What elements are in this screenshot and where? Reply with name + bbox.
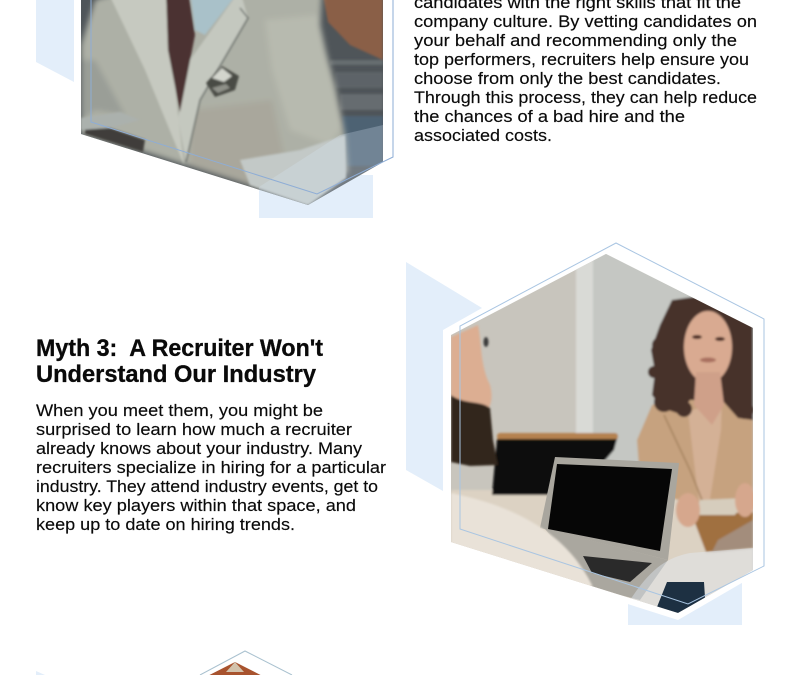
- text block: myth 3 body: [36, 401, 386, 534]
- photo: interview at a table: [451, 250, 757, 615]
- text block: myth 3 body: keep up to date on hiring trends.: [36, 515, 295, 534]
- section: next myth image (cropped): [36, 651, 292, 675]
- accent: bottom blue block: [259, 175, 373, 218]
- outline: hexagon frame: [460, 243, 764, 604]
- photo: top of next hexagon: [210, 662, 260, 675]
- outline: hexagon frame: [200, 651, 292, 675]
- accent: bottom blue block: [628, 570, 742, 625]
- text block: myth 3 body: know key players within that space, and: [36, 496, 356, 515]
- man on left: [451, 325, 492, 420]
- text block: myth 3 body: recruiters specialize in hiring for a particular: [36, 458, 386, 477]
- white hexagon backing: [445, 247, 759, 620]
- laptop: [540, 457, 679, 600]
- woman: curly hair: [651, 296, 753, 420]
- heading: myth 3: [36, 335, 323, 388]
- white shirt: [451, 493, 593, 586]
- text block: myth 2 body: Through this process, they can help reduce: [414, 88, 757, 107]
- heading: myth 3: Understand Our Industry: [36, 361, 317, 388]
- overlay: [631, 548, 753, 606]
- text block: myth 2 body: the chances of a bad hire and the: [414, 107, 685, 126]
- text block: myth 3 body: surprised to learn how much a recruiter: [36, 420, 352, 439]
- photo: man in light grey suit: [81, 0, 383, 210]
- text block: myth 2 body: [414, 0, 757, 145]
- accent: left blue block: [36, 0, 74, 82]
- accent: left blue block: [406, 262, 482, 491]
- text block: myth 2 body: top performers, recruiters help ensure you: [414, 50, 749, 69]
- phone: [657, 582, 705, 613]
- section: myth 2 image: [36, 0, 393, 218]
- text block: myth 2 body: associated costs.: [414, 126, 552, 145]
- text block: myth 2 body: your behalf and recommending only the: [414, 31, 737, 50]
- chair: [497, 433, 618, 440]
- text block: myth 3 body: industry. They attend industry events, get to: [36, 477, 378, 496]
- overlay: [259, 125, 383, 210]
- text block: myth 2 body: company culture. By vetting candidates on: [414, 12, 757, 31]
- notebook and hands: [692, 512, 753, 552]
- pocket square: [206, 66, 239, 97]
- woman: jacket: [637, 392, 753, 505]
- text block: myth 2 body: choose from only the best candidates.: [414, 69, 721, 88]
- text block: myth 3 body: When you meet them, you might be: [36, 401, 323, 420]
- heading: myth 3: Myth 3: A Recruiter Won't: [36, 335, 323, 362]
- section: myth 3 image: [406, 243, 764, 625]
- text block: myth 3 body: already knows about your industry. Many: [36, 439, 363, 458]
- accent: left blue block: [36, 671, 45, 675]
- outline: hexagon frame: [91, 0, 393, 194]
